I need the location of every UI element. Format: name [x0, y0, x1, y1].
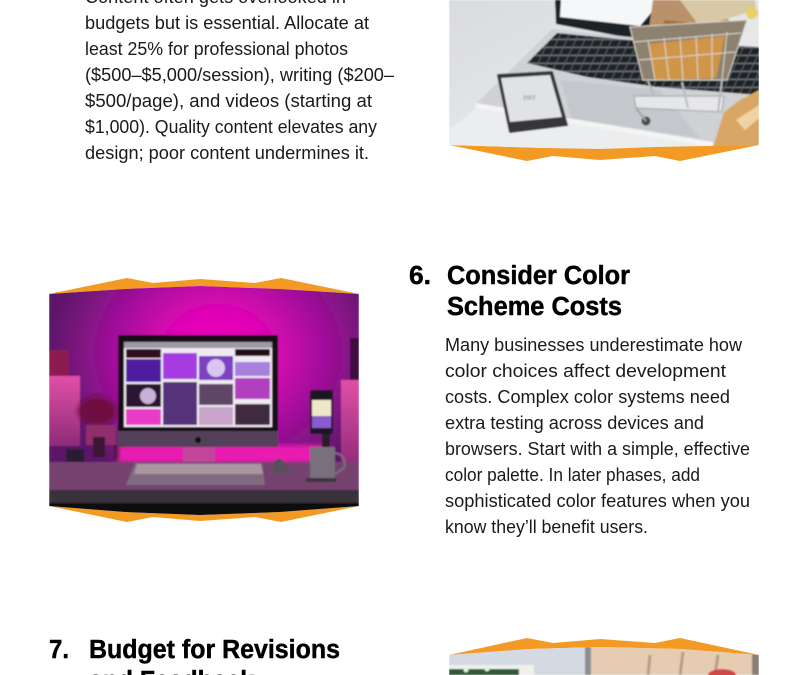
text block: step 6 color costs: extra testing across devices and	[445, 412, 704, 433]
plant and candles	[78, 397, 116, 425]
text block: step 6 color costs: color palette. In later phases, add	[445, 464, 700, 485]
text block: step 6 color costs	[445, 334, 750, 537]
mug	[310, 447, 335, 478]
text block: step 5 content budget	[85, 0, 395, 163]
photo: magenta-lit desktop computer	[49, 278, 359, 522]
phone	[498, 72, 567, 132]
mouse	[272, 458, 293, 474]
heading: step 7: Budget for Revisions	[89, 636, 340, 664]
text block: step 5 content budget: $500/page), and videos (starting at	[85, 90, 372, 111]
text block: step 6 color costs: sophisticated color features when you	[445, 490, 750, 511]
photo: bottom section image	[449, 638, 759, 675]
monitor	[117, 334, 279, 432]
text block: step 5 content budget: $1,000). Quality content elevates any	[85, 116, 378, 137]
orange banner: bottom of laptop photo	[449, 145, 759, 161]
photo: laptop, phone and shopping cart	[449, 0, 759, 161]
laptop lid	[554, 0, 652, 38]
light under the monitor	[118, 445, 330, 463]
keyboard	[126, 463, 265, 485]
photo: laptop, phone and shopping cart: PAY	[523, 95, 537, 102]
monitor stand	[183, 447, 215, 463]
shopping cart	[648, 0, 730, 26]
heading: step 7	[49, 636, 340, 675]
orange banner: top of bottom photo	[449, 638, 759, 655]
heading: step 7: 7.	[49, 636, 69, 664]
heading: step 6	[409, 262, 630, 321]
orange banner: top of desk photo	[49, 278, 359, 294]
heading: step 6: 6.	[409, 262, 431, 290]
text block: step 5 content budget: design; poor content undermines it.	[85, 142, 369, 163]
text block: step 5 content budget: budgets but is essential. Allocate at	[85, 12, 369, 33]
heading: step 6: Consider Color	[447, 262, 630, 290]
text block: step 6 color costs: know they’ll benefit users.	[445, 516, 648, 537]
laptop base	[476, 29, 759, 146]
text block: step 5 content budget: ($500–$5,000/session), writing ($200–	[85, 64, 395, 85]
orange banner: bottom of desk photo	[49, 506, 359, 522]
text block: step 6 color costs: Many businesses underestimate how	[445, 334, 743, 355]
text block: step 6 color costs: costs. Complex color systems need	[445, 386, 730, 407]
side shelves	[49, 376, 80, 446]
paper bag	[713, 90, 759, 147]
heading: step 6: Scheme Costs	[447, 293, 622, 321]
desk	[49, 462, 359, 490]
text block: step 6 color costs: browsers. Start with a simple, effective	[445, 438, 750, 459]
text block: step 5 content budget: least 25% for professional photos	[85, 38, 348, 59]
phone on stand	[310, 390, 333, 434]
text block: step 6 color costs: color choices affect development	[445, 360, 726, 381]
